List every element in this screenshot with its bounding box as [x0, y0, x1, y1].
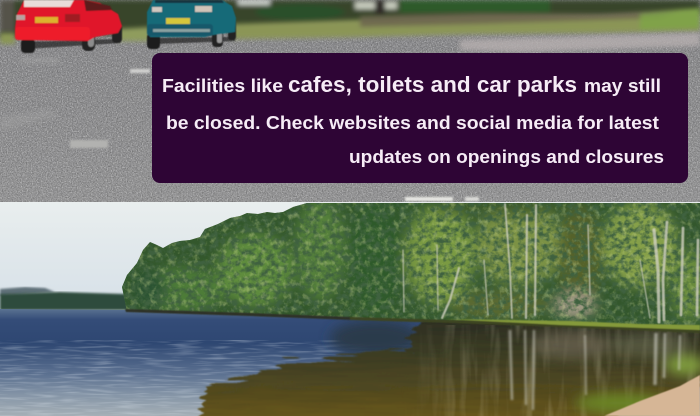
text line 1 [162, 72, 661, 97]
text line 3: updates on openings and closures [349, 147, 664, 167]
text line 1: Facilities like [162, 76, 283, 96]
birch trunks [403, 204, 698, 322]
dark blue water under the far bank [330, 320, 420, 356]
road markings [70, 69, 479, 201]
far forest [0, 292, 130, 310]
grass verge [0, 8, 700, 44]
tree reflections [196, 322, 700, 416]
woodland backdrop [0, 0, 700, 38]
reflection streaks [400, 325, 700, 416]
text line 2: be closed. Check websites and social media for latest [166, 113, 659, 133]
photo: loch and forest [0, 200, 700, 416]
icon: teal car [147, 0, 236, 49]
sandy beach [604, 375, 700, 416]
shoreline [125, 309, 700, 333]
callout panel [152, 53, 688, 183]
forest mass [110, 200, 700, 335]
text line 1: cafes, toilets and car parks [288, 72, 577, 97]
sky [0, 202, 700, 312]
text line 1: may still [584, 76, 661, 96]
icon: red car [15, 0, 122, 53]
pale road sheen [0, 33, 700, 130]
photo: car park [0, 0, 700, 202]
distant hill [0, 287, 55, 296]
loch water [0, 305, 700, 416]
